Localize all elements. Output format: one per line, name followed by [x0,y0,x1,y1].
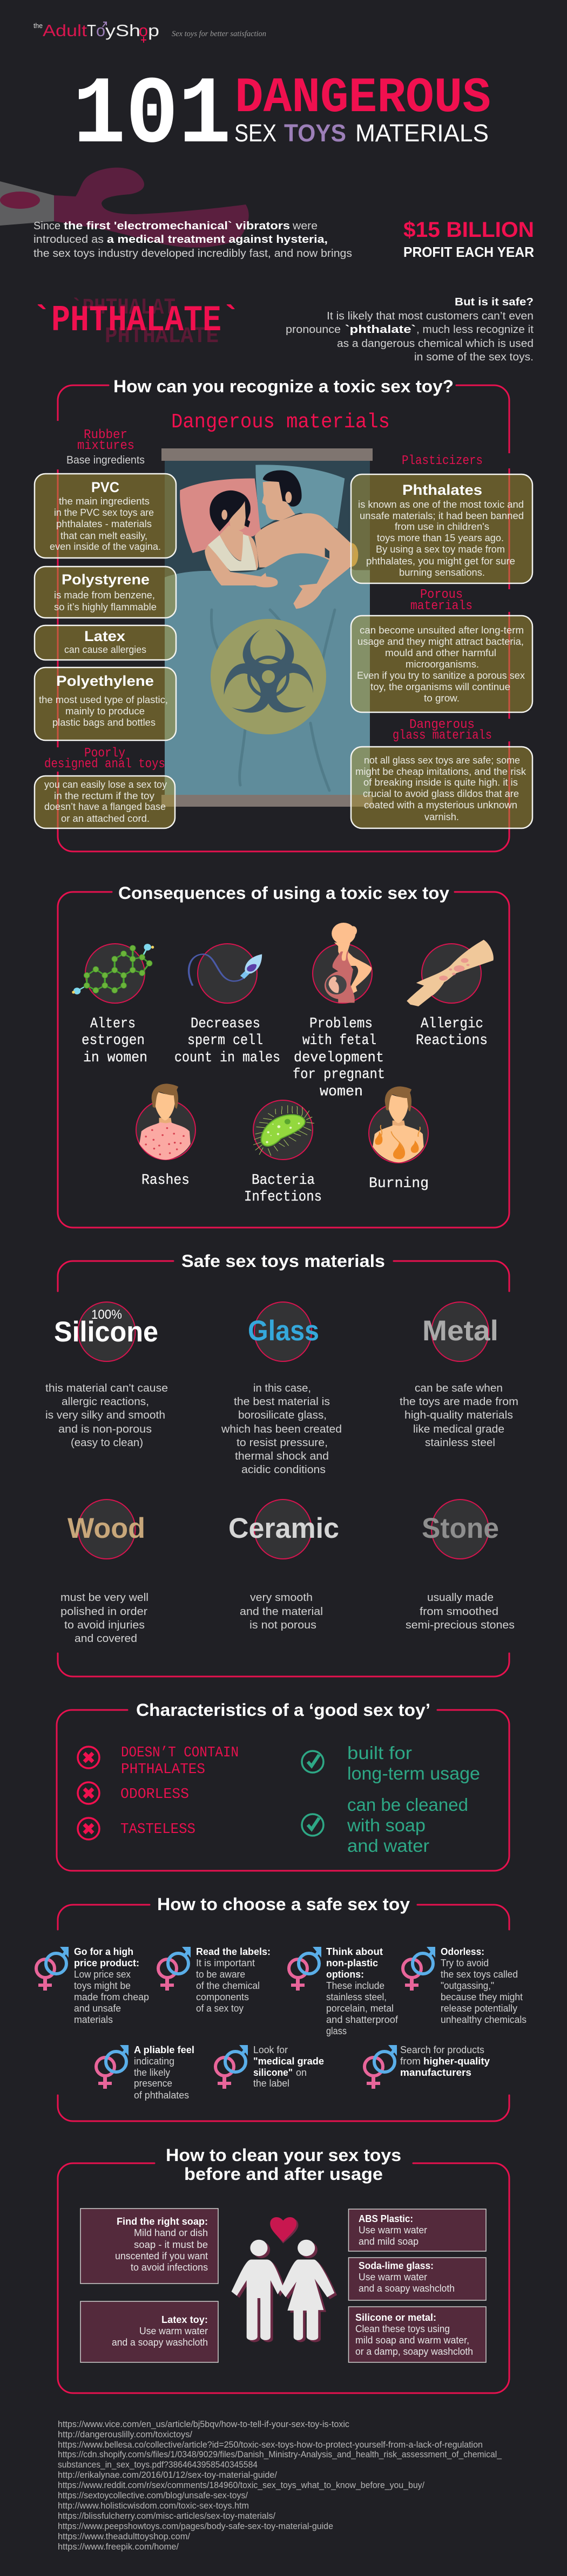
list: bad properties: TASTELESS [120,1822,195,1838]
box: PVC: PVC [91,479,119,495]
phthalate word: PHTHALATE [105,323,219,349]
material: stone: from smoothed [420,1606,498,1618]
material: ceramic: Ceramic [228,1512,339,1544]
tip: labels: It is important [196,1958,255,1968]
tip: price: price product: [74,1958,139,1968]
material: wood: must be very well [60,1592,148,1604]
tip: non-plastic: glass [326,2026,347,2036]
label: bacteria infections: Bacteria [252,1173,315,1189]
heading: How to clean your sex toys [166,2145,401,2165]
stat: profit: PROFIT EACH YEAR [403,244,534,260]
icon: biohazard [211,619,326,734]
material: stone: semi-precious stones [406,1619,515,1631]
label: rubber mixtures [66,428,145,466]
tip: odorless: unhealthy chemicals [441,2014,526,2025]
label: alters estrogen [82,1016,147,1066]
box: polyethylene [35,667,176,740]
box: latex: Latex [84,628,125,644]
box: porous: toy, the organisms will continue [370,681,510,692]
material: metal: the toys are made from [400,1396,518,1408]
box: ABS plastic [349,2209,486,2251]
label: allergic reactions: Allergic [421,1016,483,1032]
material: ceramic [228,1512,339,1631]
tip: odorless: release potentially [441,2003,517,2014]
box: phthalates: By using a sex toy made from [376,543,505,555]
material: stone: usually made [427,1592,494,1604]
box: phthalates: is known as one of the most toxic and [358,499,524,510]
sources: http://dangerouslilly.com/toxictoys/ [58,2430,192,2439]
tip: medical grade [253,2045,324,2089]
list: bad properties: DOESN’T CONTAIN [121,1745,239,1761]
material: glass: the best material is [234,1396,330,1408]
sources: https://www.bellesa.co/collective/article?id=250/toxic-sex-toys-how-to-protect-yourself-from-a-lack-of-regulation [58,2440,483,2450]
tip: medical grade: on [296,2067,307,2078]
logo: o [96,21,105,40]
panel: recognize a toxic toy [35,377,532,851]
material: silicone: (easy to clean) [71,1437,143,1449]
box: soap: unscented if you want [115,2251,208,2261]
material: metal: high-quality materials [404,1409,513,1421]
material: silicone: allergic reactions, [62,1396,149,1408]
list: good properties: long-term usage [347,1763,480,1783]
tip: non-plastic: These include [326,1980,384,1991]
icon: gender [364,2045,397,2089]
safety text: It is likely that most customers can’t even [327,310,534,322]
box: porous: usage and they might attract bacteria, [357,636,524,647]
label: decreases sperm [174,1016,280,1066]
list: bad properties: ODORLESS [120,1787,189,1803]
material: ceramic: and the material [240,1606,323,1618]
safety text: But is it safe? [455,296,534,308]
tip: pliable: the likely [134,2067,170,2078]
box: anal toys: you can easily lose a sex toy [44,779,167,790]
label: dangerous glass materials: Dangerous [409,718,475,732]
circles [85,944,481,1163]
label: allergic reactions: Reactions [416,1033,488,1049]
box: soda-lime glass: Use warm water [359,2272,427,2282]
panel: how to clean [58,2145,509,2393]
label: porous materials: materials [410,599,473,614]
tip: price: toys might be [74,1980,131,1991]
icon: rashes [139,1083,191,1160]
sources: https://www.reddit.com/r/sex/comments/184960/toxic_sex_toys_what_to_know_before_you_buy/ [58,2480,424,2490]
icon: molecule [72,944,154,994]
label: dangerous glass materials [393,718,492,743]
intro text: a medical treatment against hysteria, [107,234,328,246]
material: glass: acidic conditions [241,1464,326,1476]
icon: arm with allergy [407,940,494,1006]
sources: http://erikalynae.com/2016/01/12/sex-toy-material-guide/ [58,2470,277,2480]
tip: labels: to be aware [196,1969,245,1980]
box: soda-lime glass: and a soapy washcloth [359,2283,455,2294]
tip: odorless: Try to avoid [441,1958,489,1968]
box: glass: coated with a mysterious unknown [364,799,517,810]
material: metal: like medical grade [413,1423,504,1435]
safety text: , much less recognize it [416,324,534,336]
safety text: `phthalate` [345,324,416,336]
panel: consequences [58,883,509,1228]
illustration: couple in bed [161,448,373,807]
box: polyethylene: mainly to produce [65,705,145,717]
tip: labels: components [196,1992,249,2002]
box: anal toys [35,776,175,828]
material: metal: stainless steel [425,1437,495,1449]
material: silicone: 100% [91,1307,122,1322]
label: fetal development [293,1016,385,1100]
box: glass: might be cheap imitations, and the risk [355,766,526,777]
title [73,63,491,171]
label: porous materials: Porous [420,588,463,602]
material: metal: can be safe when [415,1382,503,1394]
safety text: in some of the sex toys. [414,351,534,363]
stat: profit [403,218,534,260]
box: silicone or metal: Clean these toys using [355,2323,450,2334]
material: stone: Stone [422,1512,499,1544]
icon: bacteria [253,1105,314,1156]
tip: non-plastic: Think about [326,1946,383,1957]
tip: medical grade: Look for [253,2045,288,2055]
tip: price: Low price sex [74,1969,131,1980]
label: fetal development: for pregnant [293,1067,385,1083]
material: stone [406,1512,515,1631]
box: PVC: even inside of the vagina. [50,541,161,552]
tip: manufacturers: from [400,2056,421,2067]
label: plasticizers: Plasticizers [402,454,483,468]
sources: https://blissfulcherry.com/misc-articles/sex-toy-materials/ [58,2511,275,2521]
box: latex [35,625,176,660]
tip: medical grade: the label [253,2078,289,2089]
box: soda-lime glass [349,2258,486,2300]
material: silicone: is very silky and smooth [45,1409,165,1421]
box: PVC: phthalates - materials [56,518,152,529]
icon: gender [403,1947,435,1991]
tip: labels: Read the labels: [196,1946,271,1957]
label: alters estrogen: in women [83,1050,147,1066]
tip: odorless: "outgassing," [441,1980,494,1991]
box: latex toy: Latex toy: [161,2314,208,2325]
box: glass: crucial to avoid glass dildos that are [363,788,519,799]
box: glass: varnish. [424,811,459,822]
box: ABS plastic: ABS Plastic: [359,2213,413,2224]
tip: non-plastic [326,1946,399,2036]
box: polystyrene: is made from benzene, [54,589,155,601]
material: wood: to avoid injuries [64,1619,145,1631]
box: anal toys: in the rectum if the toy [54,790,155,801]
list: bad properties: PHTHALATES [121,1762,205,1778]
label: rubber mixtures: mixtures [77,439,134,453]
intro text: Since [33,220,60,232]
tip: non-plastic: stainless steel, [326,1992,387,2002]
material: glass [221,1315,342,1476]
box: polystyrene: so it’s highly flammable [54,601,157,612]
sources: https://cdn.shopify.com/s/files/1/0348/9029/files/Danish_Ministry-Analysis_and_health_risk_assessment_of_chemical_ [58,2450,502,2459]
box: PVC: in the PVC sex toys are [54,507,154,518]
box: phthalates: Phthalates [402,482,482,498]
box: porous: microorganisms. [406,658,479,670]
heading: How to choose a safe sex toy [157,1894,410,1914]
label backgrounds [54,421,513,772]
tip: non-plastic: and shatterproof [326,2014,399,2025]
material: silicone: Silicone [54,1316,158,1348]
icon: gender [96,2045,129,2089]
box: porous [351,616,532,712]
tip: pliable: indicating [134,2056,174,2067]
label: porous materials [410,588,473,614]
material: glass: to resist pressure, [237,1437,328,1449]
tip: price: and unsafe [74,2003,121,2014]
sources: substances_in_sex_toys.pdf?3864643958540345584 [58,2460,258,2470]
label: decreases sperm: count in males [174,1050,280,1066]
box: phthalates: from use in children's [395,521,489,532]
box: phthalates: phthalates, you might get for sure [366,555,515,567]
tagline: Sex toys for better satisfaction [172,30,266,38]
logo: Adult [43,21,87,40]
tip: manufacturers [400,2045,490,2078]
list: good properties: and water [347,1836,429,1856]
box: polyethylene: plastic bags and bottles [52,717,156,728]
material: metal [400,1315,518,1449]
material: wood [60,1512,148,1645]
box: PVC [35,474,176,558]
material: glass: Glass [248,1315,319,1347]
tip: manufacturers: manufacturers [400,2067,471,2078]
icon: gender [158,1947,191,1991]
box: latex toy: and a soapy washcloth [112,2337,208,2348]
icon: gender [289,1947,321,1991]
list: good properties: can be cleaned [347,1795,468,1815]
label: bacteria infections [244,1173,322,1205]
box: phthalates [351,474,532,583]
circles [78,1302,489,1559]
icons: checks [302,1751,323,1836]
title: SEX [234,119,276,147]
heading: before and after usage [184,2164,383,2184]
box: soap: Mild hand or dish [134,2227,208,2238]
subheading: Dangerous materials [171,411,390,434]
box: latex toy: Use warm water [139,2326,208,2336]
icon: pregnant woman [325,923,372,1003]
material: wood: and covered [75,1633,137,1645]
box: phthalates: unsafe materials; it had been banned [360,510,524,521]
label: decreases sperm: sperm cell [187,1033,263,1049]
tip: odorless: Odorless: [441,1946,484,1957]
tip: pliable: of phthalates [134,2090,189,2101]
material: glass: which has been created [221,1423,342,1435]
heading: Consequences of using a toxic sex toy [118,883,449,903]
box: porous: Even if you try to sanitize a porous sex [357,670,525,681]
label: rubber mixtures: Base ingredients [66,454,145,466]
material: wood: polished in order [60,1606,147,1618]
label: decreases sperm: Decreases [191,1016,260,1032]
tip: non-plastic: porcelain, metal [326,2003,394,2014]
box: silicone or metal [349,2307,486,2362]
tip: non-plastic: options: [326,1969,364,1980]
tip: labels: of the chemical [196,1980,260,1991]
box: glass: of breaking inside is quite high. it is [363,776,518,788]
tip: manufacturers: higher-quality [423,2056,490,2067]
heading: How can you recognize a toxic sex toy? [113,377,454,396]
bedsheet wrinkles [211,610,335,790]
label: alters estrogen: Alters [90,1016,136,1032]
intro text: were [292,220,318,232]
tip: price: materials [74,2014,113,2025]
icon: vibrator [0,168,249,248]
tip: labels: of a sex toy [196,2003,244,2014]
tip: medical grade: "medical grade [253,2056,324,2067]
sources: https://www.vice.com/en_us/article/bj5bqv/how-to-tell-if-your-sex-toy-is-toxic [58,2420,349,2429]
box: latex: can cause allergies [64,644,146,655]
tip: odorless [441,1946,526,2025]
tip: pliable: presence [134,2078,172,2089]
tip: odorless: because they might [441,1992,523,2002]
intro text [33,220,352,260]
list: good properties: with soap [347,1815,426,1835]
logo [33,21,159,43]
heading: Characteristics of a ‘good sex toy’ [136,1700,430,1720]
label: fetal development: with fetal [302,1033,376,1049]
safety text: pronounce [286,324,341,336]
label: fetal development: Problems [309,1016,373,1032]
intro text: introduced as [33,234,104,246]
icon: sperm cell [189,954,262,986]
list: bad properties [120,1745,239,1838]
box: anal toys: or an attached cord. [61,813,150,824]
sources: https://sextoycollective.com/blog/unsafe-sex-toys/ [58,2491,248,2500]
sources: http://www.holisticwisdom.com/toxic-sex-toys.htm [58,2501,249,2511]
sources: https://www.peepshowtoys.com/pages/body-safe-sex-toy-material-guide [58,2522,333,2531]
box: silicone or metal: or a damp, soapy washcloth [355,2346,473,2357]
list: good properties [347,1743,480,1856]
phthalate word: `PHTHALATE` [32,300,240,342]
stat: profit: $15 BILLION [403,218,534,242]
box: anal toys: doesn’t have a flanged base [44,801,166,812]
tip: non-plastic: non-plastic [326,1958,378,1968]
sources [58,2420,502,2552]
material: ceramic: very smooth [250,1592,313,1604]
logo: T [87,21,96,40]
title: DANGEROUS [235,70,491,126]
label: poorly designed anal toys: designed anal toys [44,757,165,772]
box: porous: can become unsuited after long-term [360,624,524,636]
label: allergic reactions [416,1016,488,1049]
box: silicone or metal: mild soap and warm water, [355,2335,469,2346]
icons: crosses [78,1747,99,1839]
box: glass [351,747,532,828]
box: polyethylene: Polyethylene [56,673,154,689]
box: porous: mould and other harmful [385,647,496,658]
sources: https://www.freepik.com/home/ [58,2542,179,2552]
box: polystyrene [35,567,176,618]
title: MATERIALS [355,119,489,147]
material: metal: Metal [422,1315,498,1347]
tip: price: Go for a high [74,1946,133,1957]
material: wood: Wood [68,1512,145,1544]
box: glass: not all glass sex toys are safe; some [364,754,520,766]
box: soap: to avoid infections [131,2262,208,2273]
tip: labels [196,1946,271,2014]
tip: manufacturers: Search for products [400,2045,484,2055]
tip: pliable [134,2045,194,2101]
safety text [286,296,534,363]
box: phthalates: toys more than 15 years ago. [377,532,504,543]
label: alters estrogen: estrogen [82,1033,145,1049]
box: PVC: the main ingredients [59,495,150,507]
material: ceramic: is not porous [249,1619,316,1631]
box: soap [80,2209,218,2284]
tip: pliable: A pliable feel [134,2045,194,2055]
tip: medical grade: silicone" [253,2067,293,2078]
label: poorly designed anal toys: Poorly [84,746,125,761]
label: poorly designed anal toys [44,746,165,772]
icon: couple and heart [232,2217,337,2342]
box: soap: soap - it must be [134,2239,208,2250]
box: polyethylene: the most used type of plastic, [39,694,168,705]
panel: how to choose [36,1894,526,2121]
box: soda-lime glass: Soda-lime glass: [359,2260,434,2271]
title: 101 [73,63,231,171]
box: ABS plastic: Use warm water [359,2225,427,2236]
intro text: the sex toys industry developed incredibly fast, and now brings [33,248,352,260]
logo: p [148,21,159,40]
material: silicone: and is non-porous [58,1423,152,1435]
label: fetal development: women [320,1084,363,1100]
panel: safe materials [45,1251,518,1677]
panel: characteristics [57,1700,509,1871]
label: burning: Burning [369,1176,429,1192]
safety text: as a dangerous chemical which is used [337,338,534,350]
tip: price [74,1946,149,2025]
icon: gender [215,2045,248,2089]
box: silicone or metal: Silicone or metal: [355,2312,436,2323]
material: glass: thermal shock and [235,1450,329,1462]
list: good properties: built for [347,1743,412,1763]
logo: the [33,22,43,30]
label: rubber mixtures: Rubber [84,428,127,442]
label: bacteria infections: Infections [244,1189,322,1205]
box: polystyrene: Polystyrene [62,571,150,588]
label: dangerous glass materials: glass materials [393,728,492,743]
material: glass: borosilicate glass, [238,1409,327,1421]
tip: odorless: the sex toys called [441,1969,518,1980]
material: silicone [45,1307,168,1449]
label: rashes: Rashes [141,1173,190,1189]
sources: https://www.theadulttoyshop.com/ [58,2532,190,2541]
box: soap: Find the right soap: [117,2216,208,2227]
title: TOYS [284,119,346,147]
box: PVC: that can melt easily, [60,530,147,541]
box: latex toy [80,2301,218,2362]
material: glass: in this case, [253,1382,311,1394]
phthalate word [32,295,240,349]
heading: Safe sex toys materials [181,1251,385,1271]
box: phthalates: burning sensations. [399,567,485,578]
intro text: the first 'electromechanical` vibrators [64,220,290,232]
logo: ySh [105,21,140,40]
icon: gender [36,1947,69,1991]
box: porous: to grow. [424,692,460,704]
phthalate word: `PHTHALAT [71,295,176,321]
material: silicone: this material can't cause [45,1382,168,1394]
icon: burning [373,1086,424,1162]
heading [166,2145,401,2184]
tip: price: made from cheap [74,1992,149,2002]
label: fetal development: development [294,1050,384,1066]
logo: o [139,21,148,40]
box: ABS plastic: and mild soap [359,2236,418,2247]
